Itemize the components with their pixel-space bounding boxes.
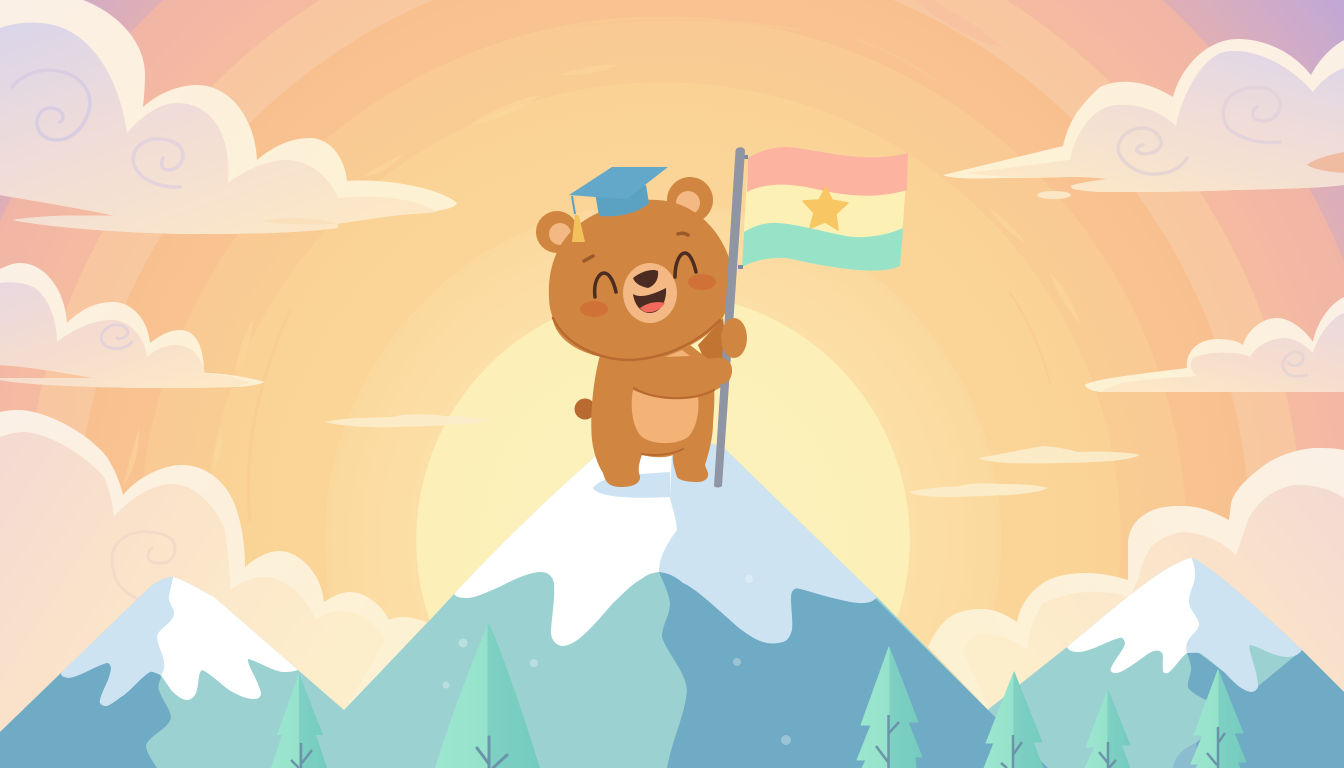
bear back layer: tail, ears, body — [536, 177, 732, 487]
graduation cap — [569, 167, 668, 242]
summit shadow under the bear — [593, 472, 670, 498]
bear lower paw — [712, 358, 732, 384]
sky streaks — [123, 0, 1080, 520]
wispy clouds around the summit — [325, 414, 1140, 497]
mountain: left — [0, 577, 400, 768]
cloud: large top left — [0, 0, 457, 234]
icon: star — [803, 187, 848, 230]
bear paws on the pole — [712, 318, 747, 384]
cloud: middle right — [1085, 297, 1344, 392]
tree: right mountain two — [1085, 690, 1130, 768]
bear nose and mouth — [633, 270, 666, 313]
tree: left mountain — [271, 673, 327, 768]
cloud: large lower right — [928, 448, 1344, 720]
bear eyebrows — [584, 233, 688, 261]
bear back arm — [698, 318, 728, 362]
bear muzzle — [623, 263, 677, 323]
bear tail — [574, 398, 596, 420]
bear eyes — [595, 253, 696, 297]
bear ear right — [667, 177, 713, 223]
cloud: large lower left — [0, 410, 427, 735]
trees — [271, 623, 1246, 768]
flag pole brackets — [738, 155, 748, 269]
snow sparkles — [442, 575, 791, 745]
bear front arm — [626, 358, 732, 398]
bear belly — [632, 390, 698, 443]
cloud: middle left — [0, 263, 265, 388]
tree: central left — [435, 623, 540, 768]
tree: right mountain three — [1191, 670, 1246, 768]
flag — [738, 147, 908, 271]
bear cheeks — [580, 274, 716, 317]
tree: right mountain one — [984, 672, 1043, 768]
mountain: central summit — [290, 425, 1048, 768]
flag pole — [714, 147, 745, 488]
cap tassel — [572, 214, 585, 242]
bear arm underline — [634, 388, 714, 398]
bear body and legs — [591, 345, 714, 487]
cloud: small wisp right of top cloud — [1037, 191, 1071, 199]
bear crotch line — [642, 449, 683, 455]
bear chest patch — [665, 350, 690, 357]
bear head — [549, 200, 733, 360]
tree: central right — [857, 647, 922, 768]
bear ear left — [536, 211, 578, 253]
mountain: right — [985, 558, 1344, 768]
cloud: top right — [943, 39, 1344, 192]
bear upper paw — [721, 318, 747, 358]
